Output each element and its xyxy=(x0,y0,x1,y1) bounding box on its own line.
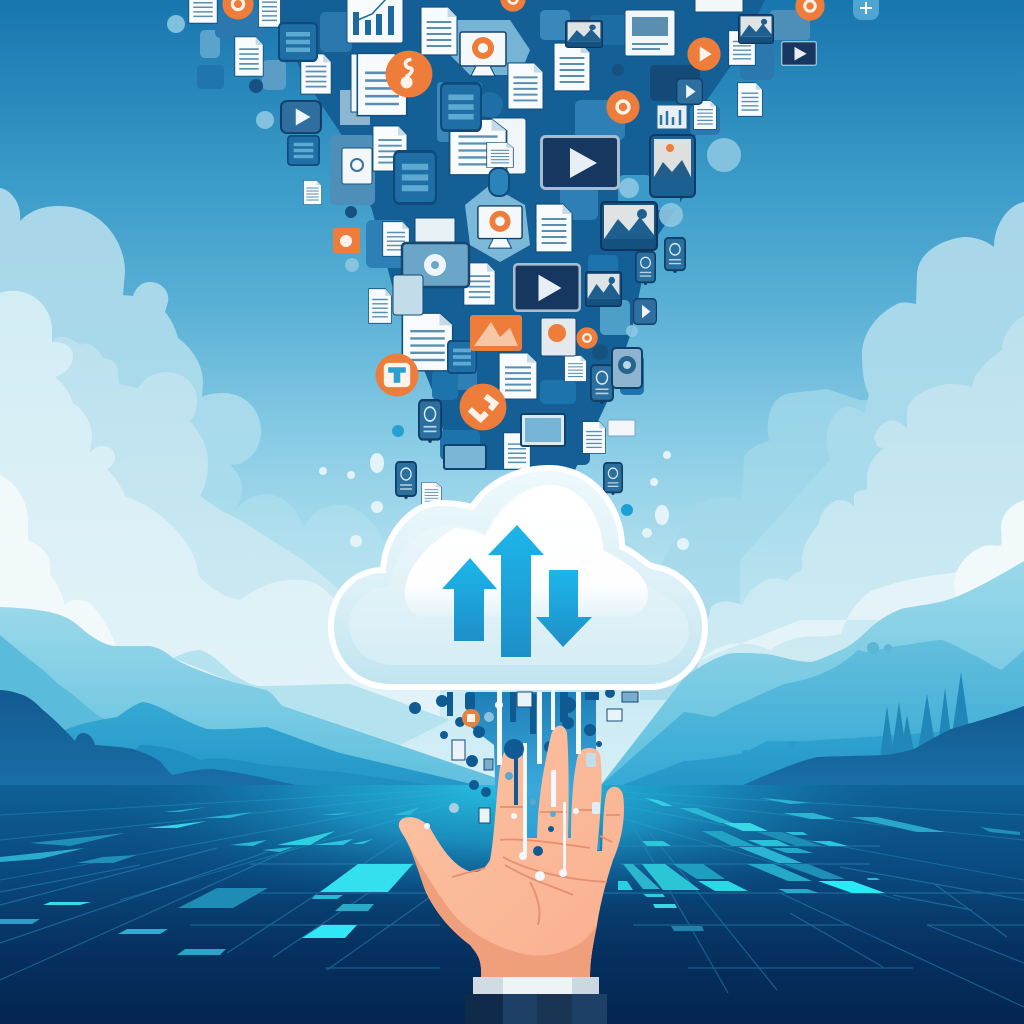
falling droplets xyxy=(319,451,689,550)
palm and fingers xyxy=(399,726,624,977)
upload arrow xyxy=(442,558,497,641)
mountains: mid ridges xyxy=(0,635,1024,786)
documents xyxy=(189,0,762,506)
data stream below cloud xyxy=(409,688,638,850)
central cloud with arrows xyxy=(331,468,705,687)
digital floor xyxy=(0,785,1024,1024)
grid lines xyxy=(0,812,1024,1007)
funnel of content icons xyxy=(167,0,879,506)
octagon backdrops xyxy=(445,20,530,75)
tree line and pine trees xyxy=(742,642,970,758)
cloud outline xyxy=(331,468,705,687)
faint horizon streaks xyxy=(0,786,1024,900)
hand xyxy=(399,726,624,977)
clouds: left bank xyxy=(0,188,440,720)
sky background xyxy=(0,0,1024,800)
inner cloud body xyxy=(349,485,689,665)
right side bubble xyxy=(853,0,879,20)
device tiles xyxy=(279,23,685,499)
bar chart card xyxy=(347,0,403,43)
clouds: right bank xyxy=(640,202,1024,700)
picture cards xyxy=(566,15,773,306)
orange badges xyxy=(222,0,825,430)
palm creases xyxy=(452,807,620,925)
hand shadow xyxy=(405,838,597,977)
white data drops over hand xyxy=(424,690,600,881)
mountains: light back ridges xyxy=(0,561,1024,786)
small bubbles xyxy=(167,15,741,437)
backing tiles xyxy=(200,10,810,465)
monitor icons xyxy=(460,32,522,248)
floor tiles xyxy=(0,798,1020,955)
mountains: dark foreground xyxy=(0,690,1024,786)
video players xyxy=(281,42,816,324)
suit sleeve xyxy=(465,994,607,1024)
tall upload arrow xyxy=(488,525,544,657)
white core xyxy=(405,485,648,617)
download arrow xyxy=(536,570,592,647)
shirt cuff xyxy=(473,977,599,995)
funnel backing xyxy=(270,0,765,470)
